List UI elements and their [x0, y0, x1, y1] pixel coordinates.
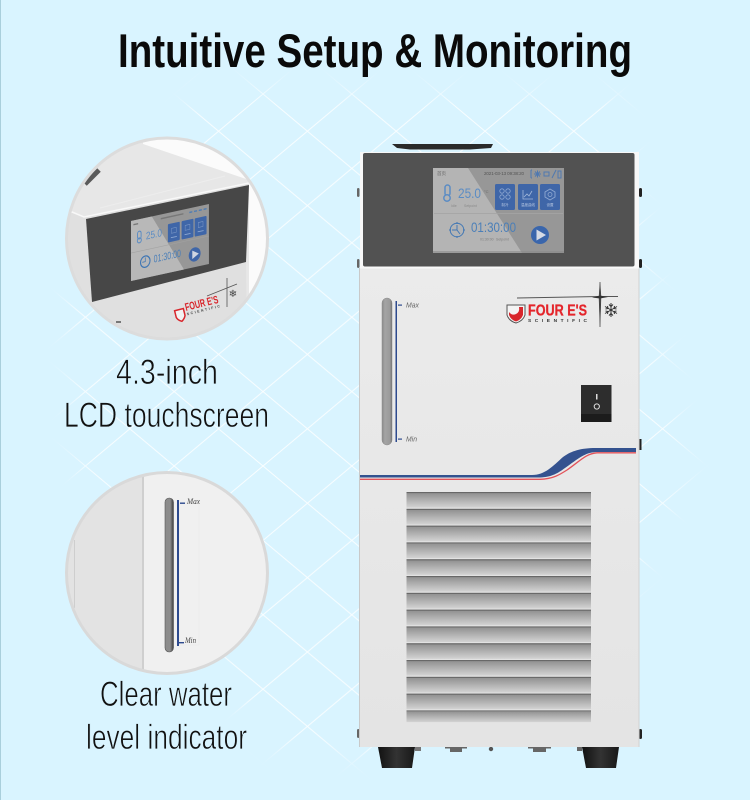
LCD screen: Idle — [451, 204, 457, 208]
angled brand logo: SCIENTIFIC — [186, 304, 221, 316]
background lattice pattern — [60, 79, 694, 764]
temperature reading: 25.0 — [458, 185, 481, 201]
blue water level scale — [396, 301, 419, 444]
title: Intuitive Setup & Monitoring — [118, 24, 632, 77]
thermometer icon — [444, 185, 450, 201]
brand logo: FOUR E'S — [528, 302, 587, 320]
angled brand logo — [173, 294, 222, 322]
label: clear water level indicator — [86, 675, 247, 757]
menu tile: curve: 温度曲线 — [521, 202, 535, 207]
label: clear water level indicator: Clear water — [100, 675, 232, 714]
LCD screen: Setpoint — [496, 238, 509, 242]
angled LCD screen: 25.0 — [146, 227, 162, 243]
play button — [531, 226, 549, 244]
LCD screen: 首页 — [437, 170, 446, 177]
angled snowflake: ❄ — [229, 289, 237, 300]
enlarged blue scale: Min — [184, 636, 196, 645]
upper cabinet — [360, 152, 639, 268]
logo shield — [507, 305, 525, 323]
label: 4.3-inch LCD touchscreen — [64, 353, 269, 435]
LCD screen: 2021-03-13 09:38:20 — [484, 171, 524, 176]
LCD screen: Setpoint — [464, 204, 477, 208]
LCD screen — [433, 168, 564, 253]
menu tile: cooling: 制冷 — [502, 202, 509, 207]
LCD screen: 01:30:00 — [480, 238, 494, 242]
ventilation louvre grille — [406, 492, 591, 723]
snowflake icon — [605, 303, 617, 317]
red and blue swoosh stripe — [360, 448, 636, 479]
LCD screen: °C — [484, 189, 489, 194]
top handle — [392, 144, 493, 150]
enlarged blue scale: Max — [186, 497, 200, 506]
sight gauge — [382, 298, 392, 445]
angled brand logo: FOUR E'S — [184, 294, 220, 314]
angled LCD screen — [131, 204, 209, 281]
enlarged blue scale — [177, 497, 200, 646]
panel: water level close-up circle — [65, 471, 269, 675]
feet and fittings — [378, 747, 619, 768]
timer reading: 01:30:00 — [471, 219, 516, 235]
label: 4.3-inch LCD touchscreen: 4.3-inch — [116, 353, 218, 392]
enlarged sight gauge — [165, 498, 174, 652]
label: clear water level indicator: level indicator — [86, 718, 247, 757]
side clips — [357, 188, 642, 739]
blue water level scale: Min — [406, 436, 417, 444]
brand logo: SCIENTIFIC — [528, 318, 588, 324]
menu tile: settings: 设置 — [546, 202, 554, 207]
power rocker switch — [581, 385, 612, 422]
angled dark panel — [86, 185, 249, 302]
chiller machine — [357, 144, 642, 768]
brand logo — [507, 282, 618, 327]
timer clock icon — [449, 222, 465, 238]
panel: LCD touchscreen close-up circle — [65, 136, 269, 340]
logo star flare — [517, 296, 618, 298]
blue water level scale: Max — [406, 302, 419, 310]
status icons — [531, 170, 561, 178]
angled LCD screen: 01:30:00 — [154, 248, 181, 266]
label: 4.3-inch LCD touchscreen: LCD touchscreen — [64, 396, 269, 435]
dark control panel — [363, 153, 634, 266]
lower cabinet — [360, 268, 639, 747]
